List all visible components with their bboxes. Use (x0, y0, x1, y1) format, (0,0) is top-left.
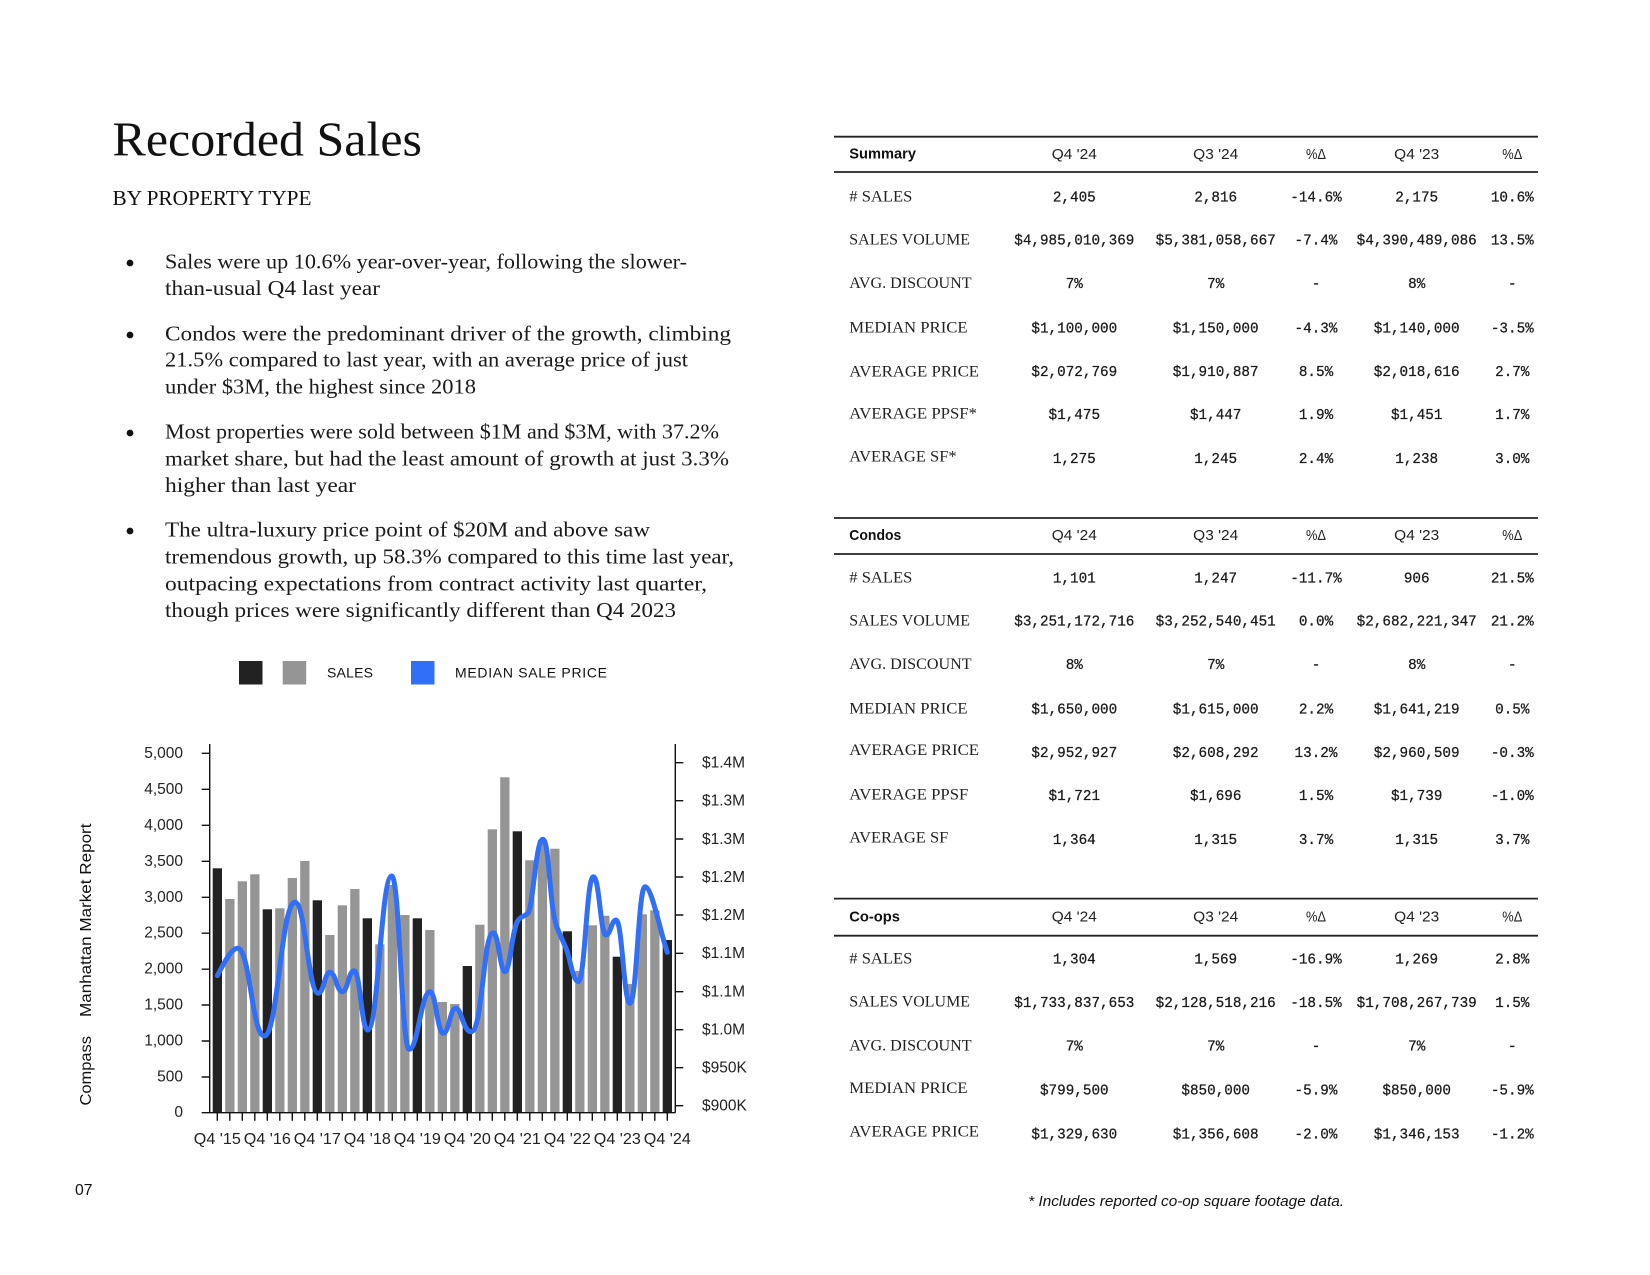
summary data rows: 8% (1408, 277, 1426, 293)
condos data rows: 906 (1404, 571, 1430, 587)
co-ops data rows: -5.9% (1295, 1084, 1338, 1100)
summary data rows: 1.9% (1299, 408, 1334, 424)
condos data rows: - (1508, 658, 1517, 674)
right axis labels: $1.2M (702, 907, 745, 924)
condos data rows: - (1312, 658, 1320, 674)
co-ops data rows: -5.9% (1491, 1084, 1534, 1100)
condos data rows: $1,721 (1049, 789, 1100, 805)
summary data rows: AVERAGE SF* (849, 448, 957, 465)
bullet 1: Sales were up 10.6% year-over-year, following the slower- (165, 249, 687, 273)
sales and median price chart (144, 744, 747, 1148)
bullet 3: market share, but had the least amount of growth at just 3.3% (165, 446, 729, 470)
bullet 2: 21.5% compared to last year, with an average price of just (165, 348, 688, 372)
condos data rows: 1,315 (1395, 833, 1438, 849)
condos header row: Q3 '24 (1193, 527, 1238, 544)
condos data rows: 1.5% (1299, 789, 1334, 805)
left axis labels: 1,500 (144, 996, 183, 1014)
condos data rows: $1,650,000 (1031, 702, 1117, 718)
condos data rows: $3,252,540,451 (1156, 615, 1276, 631)
summary data rows: -7.4% (1295, 234, 1338, 250)
bullet 4: The ultra-luxury price point of $20M and above saw (165, 518, 651, 542)
summary data rows: AVERAGE PRICE (849, 363, 979, 380)
x axis labels (194, 1131, 691, 1148)
co-ops data rows: $1,356,608 (1173, 1127, 1259, 1143)
summary header row: Q4 '24 (1052, 146, 1097, 163)
table: condos (834, 518, 1538, 849)
bullet 3: higher than last year (165, 473, 356, 497)
co-ops data rows: 7% (1207, 1039, 1225, 1055)
condos data rows: -11.7% (1290, 571, 1342, 587)
bullet 4: outpacing expectations from contract activity last quarter, (165, 571, 707, 595)
co-ops data rows: $2,128,518,216 (1156, 996, 1276, 1012)
condos data rows: 1,315 (1194, 833, 1237, 849)
co-ops data rows: 2.8% (1495, 953, 1530, 969)
summary data rows: 7% (1207, 277, 1225, 293)
table: summary (834, 137, 1538, 468)
title: Recorded Sales (112, 112, 422, 167)
summary data rows: SALES VOLUME (849, 231, 970, 248)
bullet 2 (127, 322, 731, 398)
co-ops data rows: $1,346,153 (1374, 1127, 1460, 1143)
subtitle: BY PROPERTY TYPE (112, 186, 312, 210)
bullet 4: tremendous growth, up 58.3% compared to this time last year, (165, 544, 734, 568)
co-ops data rows (849, 951, 1534, 1143)
x axis labels: Q4 '24 (644, 1131, 691, 1148)
summary data rows: $4,390,489,086 (1357, 234, 1477, 250)
footnote: * Includes reported co-op square footage data. (1028, 1193, 1344, 1210)
co-ops header row: Q4 '24 (1052, 908, 1097, 926)
left axis labels: 1,000 (144, 1032, 183, 1050)
co-ops data rows: $850,000 (1382, 1084, 1451, 1100)
bullet 1: than-usual Q4 last year (165, 276, 380, 300)
condos data rows: 3.7% (1299, 833, 1334, 849)
summary data rows: 1.7% (1495, 408, 1530, 424)
co-ops header row: %Δ (1502, 908, 1522, 926)
condos data rows: 8% (1066, 658, 1083, 674)
summary header row: Summary (849, 147, 917, 163)
summary header row: Q4 '23 (1394, 146, 1439, 163)
left axis labels: 0 (174, 1104, 183, 1121)
co-ops data rows: AVERAGE PRICE (849, 1123, 979, 1140)
condos header row: Q4 '24 (1052, 527, 1097, 544)
summary data rows: -14.6% (1290, 190, 1342, 206)
x axis labels: Q4 '20 (444, 1131, 491, 1148)
summary data rows: $1,447 (1190, 408, 1241, 424)
co-ops data rows: - (1312, 1039, 1320, 1055)
summary data rows: - (1508, 277, 1517, 293)
bullet 1 (127, 249, 687, 300)
condos header row: Condos (849, 528, 901, 544)
co-ops data rows: $1,733,837,653 (1014, 996, 1134, 1012)
summary data rows: 8.5% (1299, 365, 1334, 381)
co-ops data rows: -18.5% (1290, 996, 1342, 1012)
co-ops data rows: -1.2% (1491, 1127, 1534, 1143)
x axis labels: Q4 '19 (394, 1131, 441, 1148)
co-ops header row: Co-ops (849, 909, 900, 925)
summary data rows: 1,275 (1053, 452, 1096, 468)
condos data rows: 1,247 (1194, 571, 1237, 587)
summary data rows: 2,816 (1194, 190, 1237, 206)
bullet 2: Condos were the predominant driver of the growth, climbing (165, 322, 731, 346)
condos data rows: $2,682,221,347 (1357, 615, 1477, 631)
x axis labels: Q4 '16 (244, 1131, 291, 1148)
summary data rows: $2,072,769 (1031, 365, 1117, 381)
bullet 2: under $3M, the highest since 2018 (165, 374, 476, 398)
right axis labels: $900K (702, 1097, 747, 1114)
right axis labels: $1.4M (702, 755, 745, 772)
condos data rows: SALES VOLUME (849, 612, 970, 629)
bullet 3: Most properties were sold between $1M and $3M, with 37.2% (165, 420, 719, 444)
x axis labels: Q4 '22 (544, 1131, 591, 1148)
condos data rows: -1.0% (1491, 789, 1534, 805)
summary data rows: 7% (1066, 277, 1083, 293)
co-ops header row: %Δ (1306, 908, 1326, 926)
left axis labels: 3,500 (144, 853, 183, 870)
summary data rows: MEDIAN PRICE (849, 319, 968, 336)
condos data rows: $2,960,509 (1374, 746, 1460, 762)
summary data rows: AVERAGE PPSF* (849, 405, 977, 422)
table: co-ops (834, 899, 1538, 1143)
co-ops data rows: $850,000 (1181, 1084, 1250, 1100)
condos data rows: $1,696 (1190, 789, 1241, 805)
co-ops data rows: MEDIAN PRICE (849, 1080, 968, 1097)
condos data rows: 2.2% (1299, 702, 1334, 718)
right axis labels: $1.3M (702, 831, 745, 848)
summary data rows: 13.5% (1491, 234, 1534, 250)
x axis labels: Q4 '17 (294, 1131, 341, 1148)
chart legend: MEDIAN SALE PRICE (455, 665, 607, 681)
summary data rows: 10.6% (1491, 190, 1534, 206)
summary header row (834, 137, 1538, 172)
chart legend (239, 661, 607, 684)
condos data rows: $2,952,927 (1031, 746, 1117, 762)
summary data rows: $2,018,616 (1374, 365, 1460, 381)
right axis labels: $1.1M (702, 984, 745, 1001)
summary data rows (849, 188, 1534, 468)
right axis labels: $1.2M (702, 869, 745, 886)
left axis labels (144, 745, 183, 1121)
condos data rows: 7% (1207, 658, 1225, 674)
condos data rows: $3,251,172,716 (1014, 615, 1134, 631)
condos header row: %Δ (1502, 527, 1522, 544)
condos data rows: AVG. DISCOUNT (849, 656, 972, 673)
x axis labels: Q4 '23 (594, 1131, 641, 1148)
sales bars (213, 777, 672, 1113)
right axis labels: $1.1M (702, 945, 745, 962)
co-ops header row: Q3 '24 (1193, 908, 1238, 926)
bullet 4: though prices were significantly different than Q4 2023 (165, 598, 676, 622)
co-ops data rows: SALES VOLUME (849, 994, 970, 1011)
condos data rows (849, 569, 1534, 849)
chart axes and ticks (202, 744, 683, 1121)
summary data rows: $1,451 (1391, 408, 1442, 424)
summary header row: %Δ (1502, 146, 1522, 163)
co-ops header row: Q4 '23 (1394, 908, 1439, 926)
co-ops data rows: AVG. DISCOUNT (849, 1037, 972, 1054)
condos data rows: $1,615,000 (1173, 702, 1259, 718)
condos data rows: MEDIAN PRICE (849, 700, 968, 717)
left axis labels: 500 (157, 1068, 183, 1086)
summary data rows: 2,175 (1395, 190, 1438, 206)
summary data rows: $1,150,000 (1173, 321, 1259, 337)
bullet 4 (127, 518, 734, 622)
summary data rows: 2,405 (1053, 190, 1096, 206)
condos header row (834, 518, 1538, 554)
summary header row: %Δ (1306, 146, 1326, 163)
condos data rows: AVERAGE SF (849, 829, 948, 846)
right axis labels: $1.0M (702, 1021, 745, 1038)
summary data rows: $1,910,887 (1173, 365, 1259, 381)
summary header row: Q3 '24 (1193, 146, 1238, 163)
summary data rows: 1,238 (1395, 452, 1438, 468)
condos header row: %Δ (1306, 527, 1326, 544)
co-ops data rows: -2.0% (1295, 1127, 1338, 1143)
right axis labels: $950K (702, 1059, 747, 1076)
condos data rows: 8% (1408, 658, 1426, 674)
condos data rows: AVERAGE PRICE (849, 742, 979, 759)
condos data rows: 13.2% (1295, 746, 1338, 762)
co-ops data rows: $1,708,267,739 (1357, 996, 1477, 1012)
summary data rows: AVG. DISCOUNT (849, 275, 972, 292)
median sale price line (217, 839, 667, 1049)
co-ops data rows: -16.9% (1290, 953, 1342, 969)
left axis labels: 4,500 (144, 781, 183, 798)
x axis labels: Q4 '21 (494, 1131, 541, 1148)
condos data rows: 21.5% (1491, 571, 1534, 587)
condos data rows: 0.0% (1299, 615, 1334, 631)
summary data rows: # SALES (849, 188, 912, 205)
condos data rows: 3.7% (1495, 833, 1530, 849)
condos data rows: # SALES (849, 569, 912, 586)
right axis labels: $1.3M (702, 793, 745, 810)
left axis labels: 4,000 (144, 817, 183, 834)
condos data rows: AVERAGE PPSF (849, 786, 968, 803)
condos data rows: 21.2% (1491, 615, 1534, 631)
summary data rows: $1,475 (1049, 408, 1100, 424)
co-ops data rows: - (1508, 1039, 1517, 1055)
co-ops data rows: 1,569 (1194, 953, 1237, 969)
summary data rows: -3.5% (1491, 321, 1534, 337)
left axis labels: 5,000 (144, 745, 183, 762)
condos data rows: 1,101 (1053, 571, 1096, 587)
side label: report name: Compass (78, 1036, 95, 1106)
side label: report name: Manhattan Market Report (78, 823, 95, 1017)
summary data rows: - (1312, 277, 1320, 293)
x axis labels: Q4 '18 (344, 1131, 391, 1148)
summary data rows: -4.3% (1295, 321, 1338, 337)
bullet 3 (127, 420, 729, 497)
x axis labels: Q4 '15 (194, 1131, 241, 1148)
bullet list (127, 249, 734, 622)
co-ops data rows: 1.5% (1495, 996, 1530, 1012)
left axis labels: 2,500 (144, 925, 183, 942)
condos data rows: $1,641,219 (1374, 702, 1460, 718)
co-ops data rows: 1,269 (1395, 953, 1438, 969)
chart legend: SALES (327, 665, 373, 681)
condos header row: Q4 '23 (1394, 527, 1439, 544)
page number: 07 (75, 1182, 93, 1199)
summary data rows: 2.4% (1299, 452, 1334, 468)
co-ops data rows: # SALES (849, 951, 912, 968)
summary data rows: 2.7% (1495, 365, 1530, 381)
co-ops data rows: 7% (1408, 1039, 1426, 1055)
summary data rows: $1,100,000 (1031, 321, 1117, 337)
condos data rows: 0.5% (1495, 702, 1530, 718)
left axis labels: 2,000 (144, 961, 183, 978)
co-ops data rows: $799,500 (1040, 1084, 1109, 1100)
right axis labels (702, 754, 747, 1114)
co-ops data rows: $1,329,630 (1031, 1127, 1117, 1143)
summary data rows: $4,985,010,369 (1014, 234, 1134, 250)
summary data rows: $1,140,000 (1374, 321, 1460, 337)
condos data rows: 1,364 (1053, 833, 1096, 849)
summary data rows: 1,245 (1194, 452, 1237, 468)
condos data rows: $2,608,292 (1173, 746, 1259, 762)
co-ops header row (834, 899, 1538, 936)
co-ops data rows: 7% (1066, 1039, 1083, 1055)
side label: report name (78, 823, 95, 1106)
condos data rows: -0.3% (1491, 746, 1534, 762)
summary data rows: $5,381,058,667 (1156, 234, 1276, 250)
summary data rows: 3.0% (1495, 452, 1530, 468)
condos data rows: $1,739 (1391, 789, 1442, 805)
left axis labels: 3,000 (144, 889, 183, 906)
co-ops data rows: 1,304 (1053, 953, 1096, 969)
